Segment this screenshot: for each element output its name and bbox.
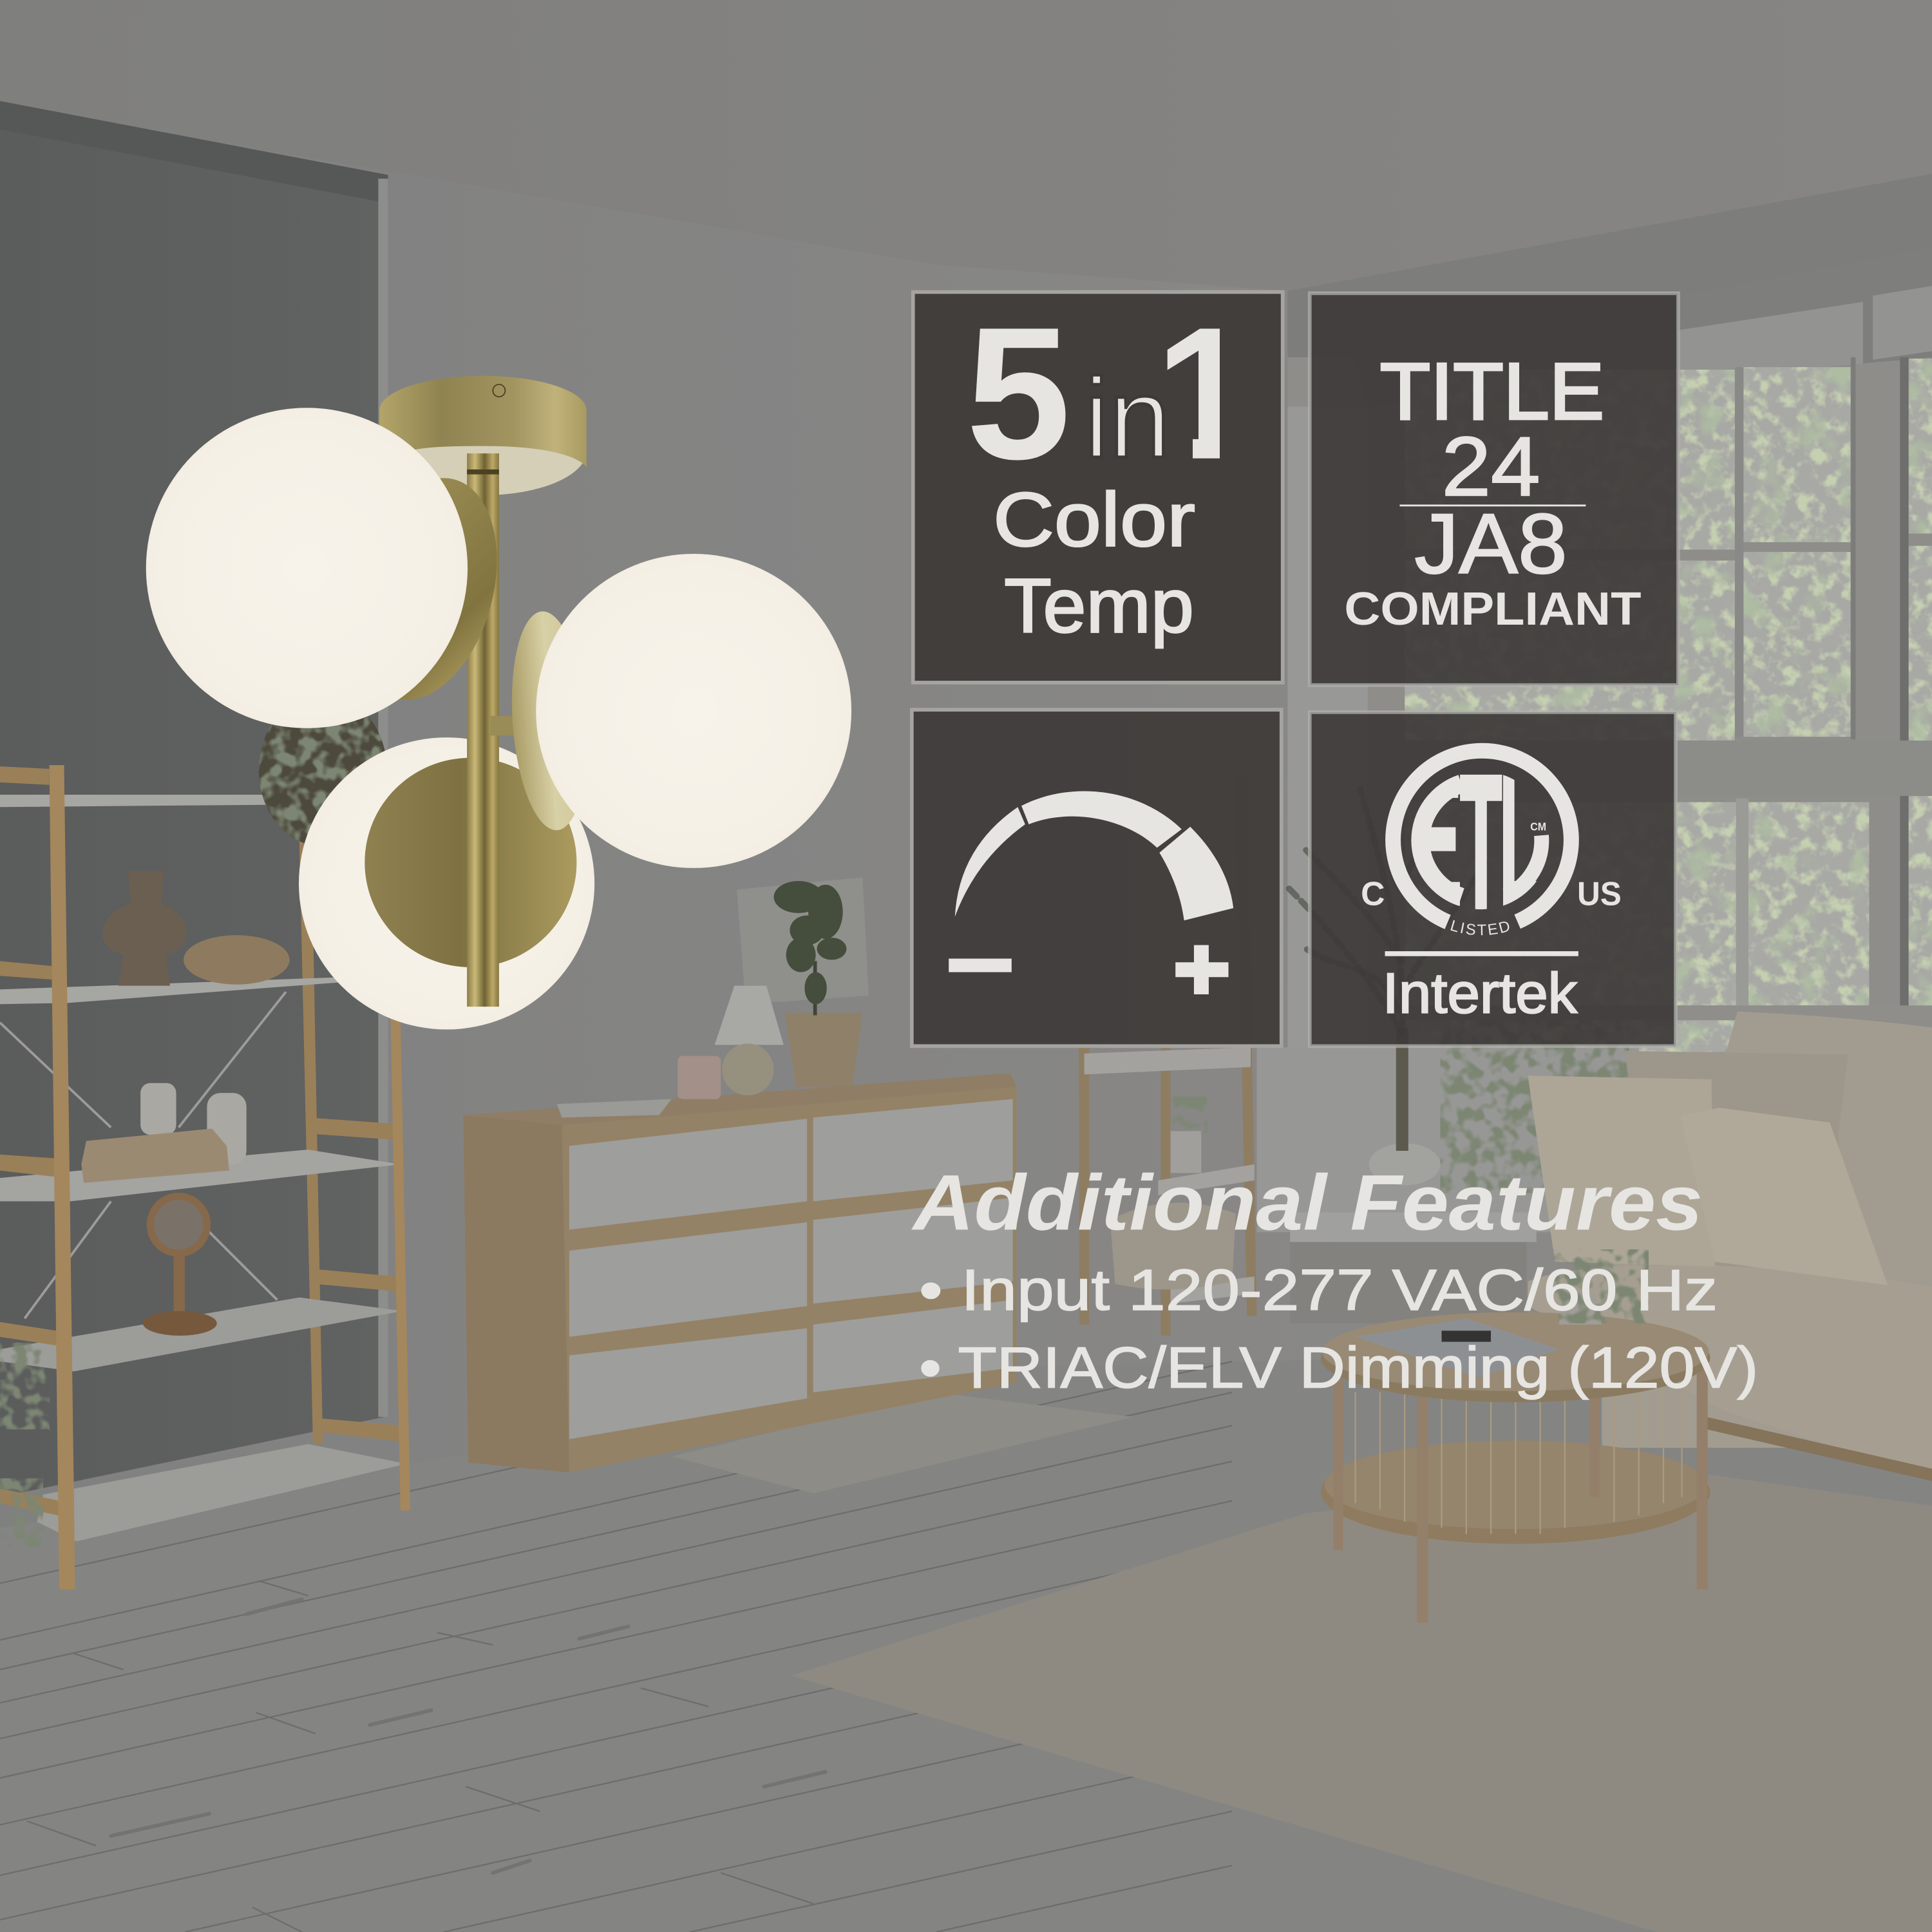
logo L curve: [1506, 835, 1542, 896]
ceiling: [0, 0, 1932, 291]
logo LISTED: LISTED: [1450, 920, 1510, 935]
window wall: [1287, 174, 1932, 1232]
stem: [467, 453, 499, 1007]
label: Color: Color: [993, 478, 1195, 563]
panel: ETL listed: [1308, 710, 1678, 1048]
lower disc: [365, 758, 576, 967]
hanging plant: [259, 716, 385, 844]
divider: [1399, 504, 1586, 506]
icon: minus: [949, 959, 1012, 972]
right disc: [505, 609, 594, 833]
divider: [1385, 951, 1578, 956]
logo: ETL mark: T: [1460, 736, 1502, 951]
right globe: [536, 554, 851, 868]
right arm connector: [490, 716, 515, 735]
floor: [0, 1343, 1932, 1932]
heading: 5 in 1: 1: [1155, 289, 1260, 499]
label: TITLE: TITLE: [1380, 347, 1604, 437]
panel box: [913, 292, 1283, 683]
panel: dimmable: [912, 710, 1282, 1046]
indoor plant with planter: [1287, 788, 1629, 1193]
feature list: [919, 1258, 1758, 1400]
panel box: [912, 710, 1282, 1046]
low wall under window: [1257, 1047, 1639, 1323]
logo CM: CM: [1530, 820, 1546, 833]
logo ring: [1393, 751, 1571, 922]
dresser: [463, 1073, 1016, 1472]
small rug: [672, 1392, 1133, 1493]
shelf decor: [0, 871, 290, 1546]
panel box: [1310, 712, 1676, 1046]
logo: ETL mark: L: [1499, 735, 1540, 944]
panel: 5 in 1 color temp: [913, 289, 1283, 683]
heading: 5 in 1: [972, 328, 1220, 460]
left shelving unit: [0, 765, 410, 1589]
panel: Title 24 JA8 compliant: [1310, 293, 1678, 685]
label: Temp: Temp: [1004, 564, 1194, 649]
coffee table: [1321, 1249, 1710, 1623]
heading: additional features: Additional Features: [911, 1158, 1703, 1246]
heading: 5 in 1: 5: [966, 289, 1071, 499]
icon: plus: [1175, 945, 1229, 994]
floor planks: [0, 1361, 1232, 1932]
logo C: C: [1361, 875, 1385, 912]
logo: ETL mark: E: [1406, 735, 1463, 944]
label: JA8: JA8: [1414, 496, 1567, 591]
label: 24: 24: [1442, 419, 1540, 513]
feature: input voltage: • Input 120-277 VAC/60 Hz: [919, 1258, 1718, 1323]
canopy: [379, 376, 587, 495]
upper arm disc: [330, 462, 520, 716]
lower globe: [299, 737, 594, 1030]
window panes: [1392, 345, 1932, 1084]
roller blind: [0, 101, 388, 1497]
logo: ETL mark: [1361, 743, 1622, 935]
logo E curve: [1421, 784, 1461, 897]
feature: dimming: • TRIAC/ELV Dimming (120V): [919, 1336, 1758, 1400]
label: Intertek: Intertek: [1383, 961, 1578, 1025]
icon: dimming arc: [955, 791, 1233, 920]
heading: 5 in 1: in: [1084, 355, 1171, 482]
logo US: US: [1577, 875, 1622, 912]
tall back shelf: [1078, 776, 1257, 1336]
dresser decor: [677, 877, 869, 1099]
large rug: [791, 1475, 1932, 1932]
wall: [0, 99, 1932, 1602]
sofa: [1528, 1012, 1932, 1481]
upper globe: [146, 408, 468, 728]
ceiling light fixture: [146, 376, 851, 1030]
panel box: [1310, 293, 1678, 685]
label: COMPLIANT: COMPLIANT: [1344, 583, 1641, 635]
